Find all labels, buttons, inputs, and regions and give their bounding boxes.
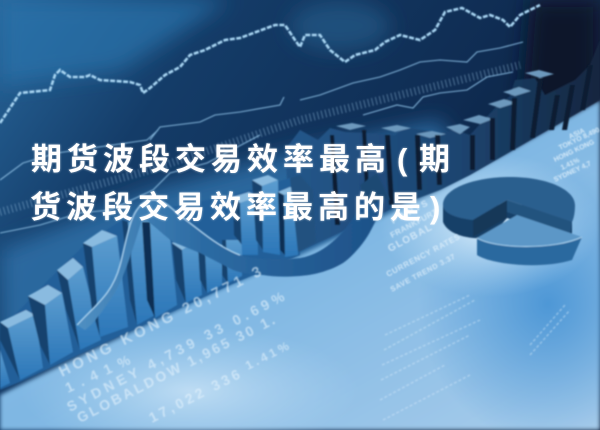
bar 1 — [0, 310, 43, 380]
ticker text centre: FRANKFURT — [389, 207, 439, 240]
tick strip band — [0, 65, 520, 212]
bar 4 — [83, 230, 128, 337]
bar 12 — [278, 187, 298, 257]
ticker text upper right: HONG KONG — [553, 139, 596, 164]
ticker text centre: SAVE TREND 3.37 — [389, 252, 457, 294]
ticker text upper right: TOKYO 8,490 — [558, 127, 600, 152]
candlestick price line — [0, 5, 540, 123]
pie slice — [477, 215, 582, 265]
ticker text upper right: 1.41% — [560, 157, 582, 172]
ticker text upper right: ASIA — [568, 127, 586, 141]
bar 6 — [142, 222, 177, 318]
ticker text lower left: 1.41% — [243, 339, 292, 373]
pie main body — [443, 177, 575, 240]
thin trend lines — [0, 42, 523, 233]
ticker text centre: GLOBAL — [386, 222, 434, 255]
ticker text upper right: SYDNEY 4,7 — [553, 160, 592, 184]
filler behind left bars — [0, 175, 300, 390]
bar 8 — [198, 245, 222, 293]
glow lower left — [20, 300, 360, 430]
bar 2 — [28, 285, 73, 365]
title line 1: 期货波段交易效率最高 期 — [31, 142, 455, 177]
ticker text lower left: SYDNEY 4,739 33 0.69% — [64, 288, 287, 415]
bar 7 — [172, 232, 202, 303]
background bars, right dark group — [285, 40, 600, 255]
title line 1: ( — [397, 142, 407, 177]
bars, left blue group — [0, 175, 316, 390]
ticker text lower left: 1.41% — [63, 351, 133, 396]
title line 2: 货波段交易效率最高的是 — [30, 190, 426, 225]
title line 2: ) — [430, 190, 440, 225]
bar 3 — [57, 258, 101, 350]
ticker text centre: PARIS — [389, 198, 429, 226]
glow around pie — [380, 153, 600, 297]
bar 10 — [233, 192, 258, 255]
ticker text lower left: GLOBALDOW 1,965 30 1. — [74, 312, 277, 426]
bar 11 — [252, 175, 280, 255]
bar 0 — [0, 350, 10, 388]
ticker text centre — [385, 198, 462, 294]
ticker text lower left: 17,022 336 — [146, 366, 243, 426]
ticker text lower left: HONG KONG 20,771 3 — [56, 263, 264, 381]
ticker text centre: CURRENCY RATES — [385, 232, 462, 279]
light lower background — [0, 100, 600, 430]
pie chart — [443, 177, 582, 265]
bar 9 — [222, 240, 242, 283]
bar 5 — [122, 220, 155, 325]
saturated blue blob right side — [340, 150, 600, 430]
faint data rows lower right — [380, 295, 570, 420]
ticker text upper right — [553, 127, 600, 184]
curved arrow ribbon — [77, 173, 390, 330]
bar 13 — [290, 175, 316, 252]
